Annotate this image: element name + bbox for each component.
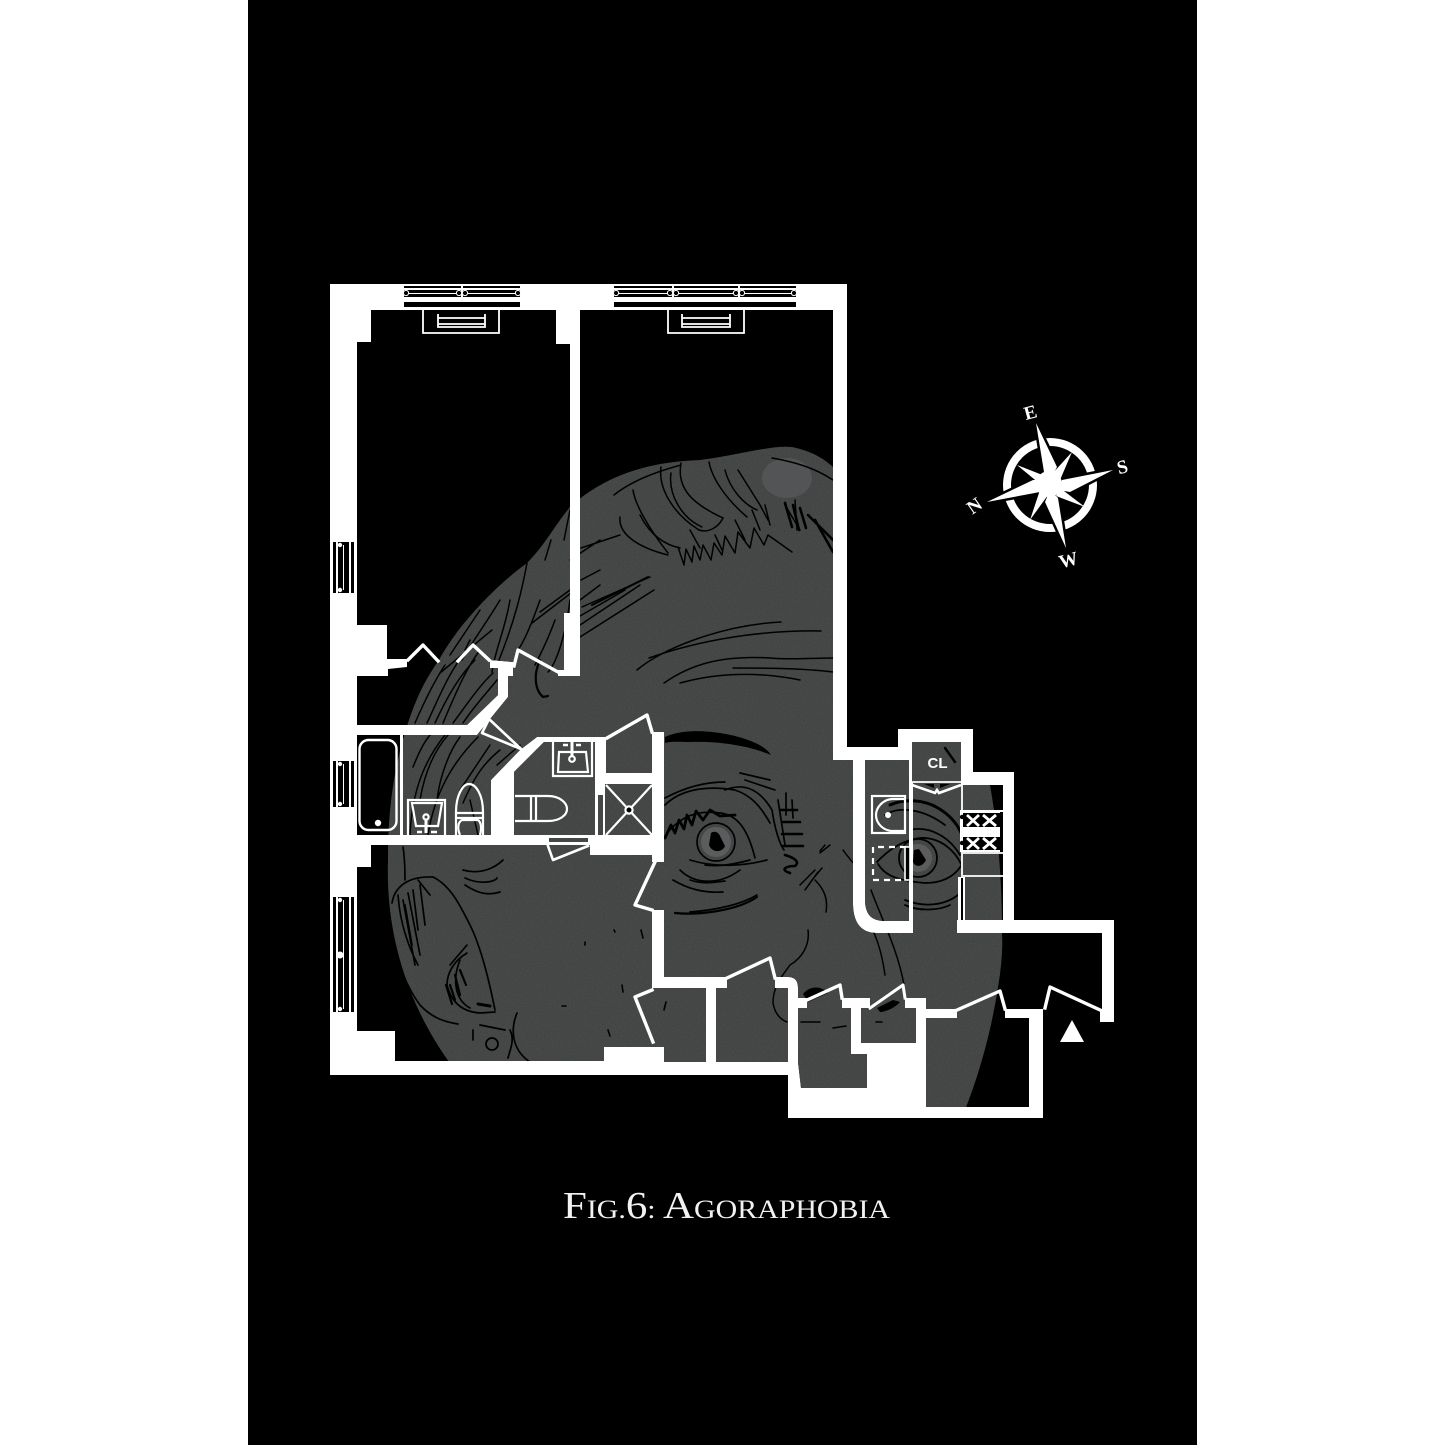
bathroom toilet [456,784,483,835]
ensuite toilet [515,796,567,821]
black poster panel [248,0,1197,1445]
compass hub [1036,471,1062,497]
entrance marker [1060,1020,1084,1042]
compass ring [1007,442,1093,528]
compass letter E: E [1022,401,1039,425]
scalp highlight [762,458,812,498]
top window left [403,286,521,307]
left eyebrow [665,731,771,755]
caption: FIG.6: AGORAPHOBIA [563,1185,890,1227]
top window right [613,286,797,307]
head silhouette [388,447,1002,1110]
compass letter S: S [1115,456,1130,479]
bathroom sink [408,800,445,835]
bathtub [360,735,403,835]
compass letter W: W [1057,548,1080,573]
compass letter N: N [963,494,987,519]
face illustration seen through the rooms [388,447,1002,1110]
specks on cheek [562,930,666,1036]
closet door chevron [912,784,961,793]
shower [606,785,652,835]
nostrils [803,988,900,1012]
door swing lines [408,645,1100,1042]
right iris and pupil [904,844,932,872]
cheek wrinkles [773,845,904,1028]
left wall windows [333,542,354,1012]
dishwasher dashed outline [873,847,906,880]
floor plan rooms [357,310,1102,1107]
compass points [987,423,1113,548]
right eye [877,748,962,910]
closet label: CL [928,755,948,772]
compass points outline [987,423,1113,548]
dishwasher door bar [905,847,910,880]
radiators [423,308,744,333]
kitchen sink [872,796,905,833]
compass rose [963,401,1130,573]
left eye [665,773,803,914]
left iris and pupil [701,827,731,857]
fridge [958,877,965,920]
ensuite sink [553,742,592,776]
hair strokes [410,458,833,835]
ear [390,847,530,1062]
floor plan walls [330,284,1114,1118]
kitchen dividers [912,782,1003,878]
floor plan [330,284,1114,1118]
stove [960,810,1003,852]
